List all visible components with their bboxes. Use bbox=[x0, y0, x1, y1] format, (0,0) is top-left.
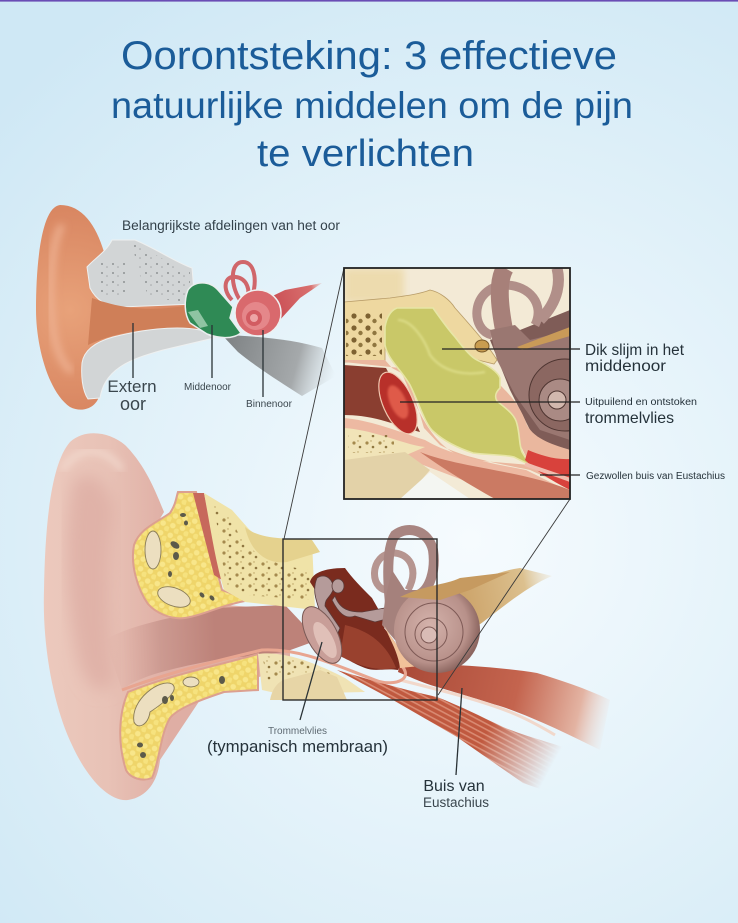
inset panel: infected middle ear bbox=[344, 268, 725, 499]
label: middle ear: Middenoor bbox=[184, 382, 232, 393]
label: bulging eardrum: trommelvlies bbox=[585, 410, 674, 427]
icon: middle ear cavity bbox=[310, 568, 403, 670]
label: outer ear: oor bbox=[120, 394, 146, 414]
icon: outer ear orange bbox=[36, 205, 195, 410]
icon: outer ear bbox=[44, 433, 290, 800]
icon: eustachian tube grey bbox=[222, 335, 336, 396]
label: swollen tube: Gezwollen buis van Eustachius bbox=[586, 471, 725, 482]
title: Oorontsteking: 3 effectieve bbox=[121, 34, 617, 78]
icon: concha inner fold bbox=[67, 475, 116, 690]
icon: nerve strands bbox=[517, 327, 570, 350]
icon: muscle band bbox=[193, 493, 222, 580]
label: inner ear: Binnenoor bbox=[246, 399, 293, 410]
label: eardrum: Trommelvlies bbox=[268, 726, 327, 737]
label: outer ear bbox=[107, 377, 157, 414]
icon: nerve bundle bbox=[430, 568, 552, 635]
icon: bulging eardrum bbox=[378, 372, 418, 434]
icon: labyrinth background bbox=[490, 310, 570, 450]
icon: semicircular canals red bbox=[226, 262, 255, 302]
label: tympanic membrane: (tympanisch membraan) bbox=[207, 737, 388, 756]
icon: semicircular canals bbox=[374, 530, 434, 620]
inset frame bbox=[344, 268, 570, 499]
icon: cavity lower shade bbox=[340, 625, 396, 669]
icon: lower bone bbox=[258, 653, 365, 694]
icon: ear fold highlights bbox=[51, 225, 72, 372]
icon: green highlight bbox=[188, 310, 208, 328]
icon: striated beige tissue bbox=[270, 670, 347, 700]
icon: lower grey bone bbox=[82, 328, 214, 399]
icon: top beige tissue bbox=[344, 268, 404, 303]
icon: ear canal inset bbox=[344, 365, 420, 432]
icon: ear canal bbox=[105, 605, 318, 690]
icon: tube pale lining bbox=[525, 464, 570, 480]
icon: vestibule bbox=[382, 570, 435, 650]
icon: bone sponge bbox=[346, 312, 382, 356]
icon: nerve small bbox=[400, 572, 510, 600]
icon: slime highlight bbox=[398, 320, 485, 373]
title bbox=[111, 34, 633, 175]
icon: bone sponge texture bbox=[214, 505, 312, 600]
icon: lower bone sponge bbox=[262, 656, 340, 680]
icon: lower left tissue bbox=[344, 452, 430, 499]
label lines bbox=[133, 323, 263, 397]
icon: pink wall bbox=[344, 360, 570, 488]
icon: canal loops bbox=[477, 268, 558, 335]
label: outer ear: Extern bbox=[107, 377, 157, 396]
icon: ossicles bbox=[315, 576, 390, 640]
icon: lower bone bbox=[344, 428, 425, 462]
icon: cochlea inset bbox=[528, 358, 570, 432]
heading: main parts: Belangrijkste afdelingen van het oor bbox=[122, 218, 340, 233]
title: te verlichten bbox=[257, 133, 474, 175]
label: bulging eardrum: Uitpuilend en ontstoken bbox=[585, 397, 697, 408]
label: eustachian tube bbox=[423, 778, 489, 810]
icon: tube pale lining bbox=[400, 680, 555, 735]
top diagram: main parts of the ear bbox=[36, 205, 340, 414]
icon: swollen tube red bbox=[525, 450, 570, 490]
label line: eustachian tube bbox=[456, 688, 462, 775]
main ear diagram bbox=[44, 268, 610, 810]
label line: eardrum bbox=[300, 642, 322, 720]
icon: bone band bbox=[344, 290, 497, 364]
icon: smooth upper bone bbox=[245, 527, 320, 562]
icon: cochlea red bbox=[235, 290, 281, 336]
label: bulging eardrum bbox=[585, 397, 697, 427]
icon: slime fluid bbox=[385, 308, 530, 465]
icon: vestibule bbox=[490, 325, 570, 440]
icon: upper grey bone texture bbox=[133, 243, 190, 302]
icon: cochlea bbox=[394, 587, 480, 673]
icon: cartilage pieces bbox=[145, 531, 193, 611]
icon: fat dark spots bbox=[168, 513, 215, 602]
icon: middle ear green bbox=[185, 283, 241, 338]
icon: canal lower lining bbox=[344, 418, 556, 485]
icon: eustachian tube muscle bbox=[337, 670, 559, 788]
icon: upper fatty tissue bbox=[133, 492, 250, 618]
icon: ear canal bbox=[88, 298, 200, 345]
icon: pale area under muscle bbox=[400, 472, 470, 499]
icon: tube muscle bbox=[420, 452, 570, 499]
icon: lower bone sponge bbox=[348, 435, 394, 453]
label: eustachian tube: Eustachius bbox=[423, 795, 489, 810]
icon: upper bone bbox=[204, 493, 315, 610]
icon: eustachian tube bbox=[398, 663, 610, 750]
zoom box bbox=[283, 539, 437, 700]
zoom connector lines bbox=[284, 268, 570, 695]
icon: lower cartilage pieces bbox=[134, 677, 199, 726]
icon: grey dots left bbox=[100, 262, 128, 298]
title: natuurlijke middelen om de pijn bbox=[111, 85, 633, 126]
icon: small bone oval bbox=[475, 340, 489, 352]
label: eustachian tube: Buis van bbox=[423, 778, 485, 795]
icon: pink bone wall bbox=[384, 625, 440, 668]
label: thick mucus: middenoor bbox=[585, 358, 666, 375]
icon: pink canal lining bbox=[122, 650, 405, 690]
icon: upper grey bone bbox=[87, 240, 195, 307]
icon: lower fat spots bbox=[137, 676, 225, 758]
icon: eardrum bbox=[294, 601, 350, 669]
icon: red nerve bundle bbox=[258, 283, 322, 322]
icon: lower fatty tissue bbox=[120, 654, 258, 780]
label: thick mucus bbox=[585, 342, 685, 375]
icon: ear rim highlight bbox=[62, 451, 122, 470]
label: thick mucus: Dik slijm in het bbox=[585, 342, 685, 359]
label lines: inset bbox=[400, 349, 580, 475]
